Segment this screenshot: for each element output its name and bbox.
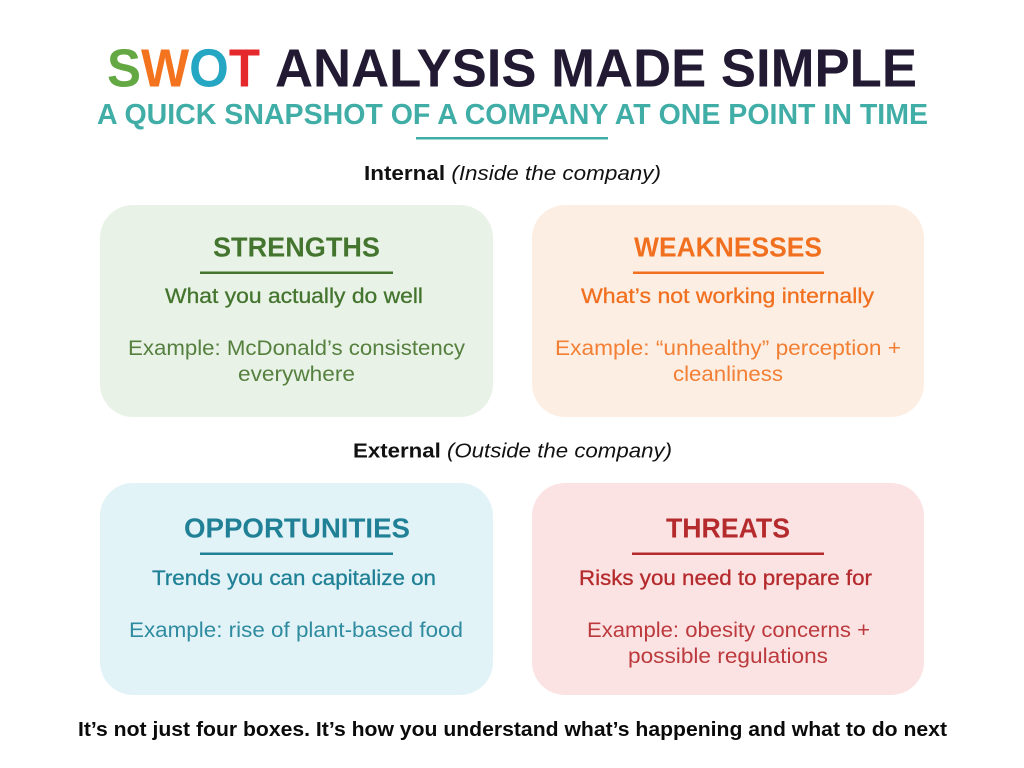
panel: threats [532,483,924,695]
weaknesses example: Example: “unhealthy” perception + [555,337,901,360]
panel: weaknesses [532,205,924,417]
opportunities example: Example: rise of plant-based food [129,619,463,642]
threats description: Risks you need to prepare for [579,567,872,590]
weaknesses example: cleanliness [673,363,783,386]
strengths example: everywhere [238,363,355,386]
weaknesses description: What’s not working internally [581,285,875,308]
strengths heading: STRENGTHS [213,232,380,262]
heading: external: External (Outside the company) [353,440,672,462]
weaknesses example [555,337,901,386]
subtitle: A QUICK SNAPSHOT OF A COMPANY AT ONE POINT IN TIME [97,99,928,131]
strengths example [128,337,466,386]
title: ANALYSIS MADE SIMPLE [275,38,917,98]
threats heading: THREATS [666,512,790,544]
strengths example: Example: McDonald’s consistency [128,337,466,360]
heading: internal: Internal (Inside the company) [364,163,661,185]
opportunities heading: OPPORTUNITIES [184,512,410,544]
closing statement: It’s not just four boxes. It’s how you understand what’s happening and what to do next [78,719,947,741]
threats example [587,619,870,668]
opportunities description: Trends you can capitalize on [152,567,436,590]
threats example: possible regulations [628,645,828,668]
panel: strengths [100,205,493,417]
title: SWOT [107,38,260,98]
strengths description: What you actually do well [165,285,423,308]
panel: opportunities [100,483,493,695]
weaknesses heading: WEAKNESSES [634,232,822,262]
subtitle underline [416,137,608,140]
threats example: Example: obesity concerns + [587,619,870,642]
